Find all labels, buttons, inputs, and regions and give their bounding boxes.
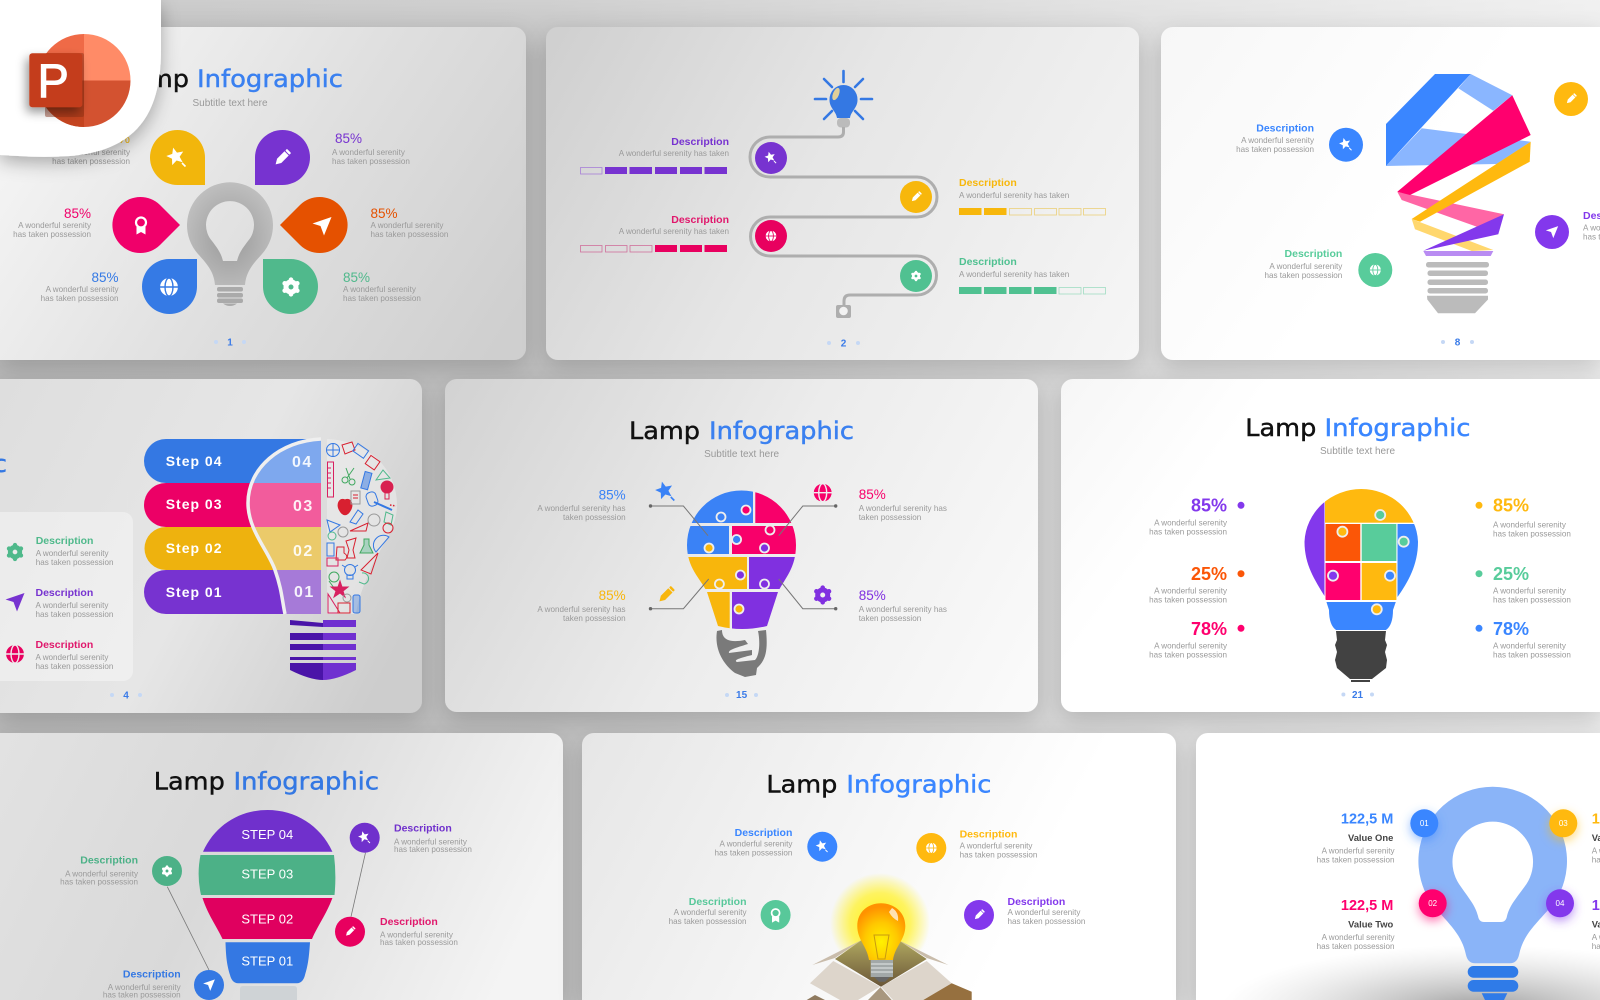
subtitle: Subtitle text here [704, 449, 780, 460]
title: slide 15 [629, 417, 854, 445]
text: purple [859, 588, 947, 623]
winding gray path [750, 127, 937, 306]
text and progress: pink [580, 214, 729, 252]
text: pink: 78% [1191, 619, 1227, 639]
text: blue: Description [735, 827, 792, 839]
text: green: Description [689, 896, 746, 908]
pager: slide 15: 15 [736, 690, 748, 701]
text: blue: A wonderful serenity [1493, 641, 1567, 650]
text: yellow: Description [960, 829, 1017, 841]
text: purple [394, 823, 472, 854]
panel: slide with step lamp [0, 733, 563, 1000]
text: value four [1592, 898, 1600, 951]
badge 03 [1549, 809, 1577, 841]
text: purple: Description [1008, 896, 1065, 908]
lamp: step 03: STEP 03 [241, 867, 293, 882]
text: blue: A wonderful serenity has [537, 504, 626, 513]
title: slide 15: Infographic [709, 417, 854, 445]
text: orange item: A wonderful serenity [370, 221, 444, 230]
bars: steps 01 to 04: Step 04 [166, 453, 223, 469]
text: value one: Value One [1348, 832, 1393, 843]
lamp: gray bulb [187, 182, 273, 306]
node: yellow [916, 833, 946, 863]
lamp: blue bulb [1418, 787, 1567, 1000]
text: green: A wonderful serenity [65, 870, 139, 879]
text: blue: 78% [1493, 619, 1529, 639]
text: purple: 85% [1191, 496, 1227, 516]
text and progress: pink: A wonderful serenity has taken [619, 227, 729, 236]
text: blue [537, 487, 626, 522]
pager: slide 1: 1 [227, 338, 233, 348]
text: green: 25% [1493, 564, 1529, 584]
pager: slide 21: 21 [1352, 690, 1363, 701]
text: blue: 85% [599, 487, 626, 502]
text: purple: A wonderful serenity [1008, 908, 1081, 917]
title: Infographic [846, 770, 991, 798]
text: green: A wonderful serenity [1269, 262, 1343, 271]
node: yellow [900, 181, 932, 213]
item: green: Description [36, 535, 93, 547]
text and progress: green [959, 256, 1106, 294]
panel: slide 8 ribbon lamp [1161, 27, 1600, 360]
text: pink: A wonderful serenity [1154, 641, 1228, 650]
panel: slide with blue lamp values [1196, 733, 1600, 1000]
node: pink [335, 917, 365, 947]
text: yellow: taken possession [563, 614, 626, 623]
text: purple: Description [394, 823, 452, 835]
lamp base: purple [290, 620, 356, 680]
text: green [60, 855, 139, 886]
item: pink: has taken possession [36, 662, 113, 671]
text: blue [103, 968, 182, 1000]
text: blue item: has taken possession [41, 294, 118, 303]
node: blue [194, 970, 224, 1000]
text: orange [1149, 564, 1244, 605]
title: slide 15: Lamp [629, 417, 700, 445]
text: pink item: 85% [64, 206, 91, 221]
icon: gear [814, 585, 831, 605]
text: purple item: A wonderful serenity [332, 148, 406, 157]
card: description list [0, 512, 133, 681]
node: purple [350, 823, 380, 853]
icon: green petal [263, 259, 318, 314]
node: pink [755, 220, 787, 252]
text: purple item: has taken possession [332, 157, 410, 166]
text: blue: has taken possession [1236, 145, 1314, 154]
text: yellow: has taken possession [1493, 529, 1571, 538]
title: slide 21 [1245, 414, 1470, 442]
text: green: A wonderful serenity [674, 908, 747, 917]
title: slide 1: Lamp [118, 65, 189, 93]
lamp base [240, 986, 297, 1000]
text: pink [1149, 619, 1244, 659]
pager: slide 8: 8 [1455, 338, 1461, 348]
text: blue: has taken possession [103, 990, 181, 1000]
text: value two: Value Two [1348, 919, 1394, 930]
text: yellow [1476, 496, 1571, 538]
subtitle: Subtitle text here [192, 98, 268, 109]
text: pink: 85% [859, 487, 886, 502]
text: pink: taken possession [859, 513, 921, 522]
text: blue: A wonderful serenity [720, 839, 793, 848]
text: purple: A wonderful serenity has [859, 605, 947, 614]
lamp: color pieces [1304, 489, 1418, 630]
text: yellow [537, 588, 626, 623]
bars: steps 01 to 04: 01 [294, 584, 315, 601]
text and progress: purple [580, 136, 729, 174]
text: blue: Description [1256, 123, 1314, 135]
badge 03: 03 [1559, 819, 1568, 828]
text: blue [715, 827, 793, 857]
text: pink [859, 487, 947, 522]
icon: P tile: P [38, 54, 69, 107]
text: yellow item [52, 131, 131, 166]
floor shadow [1196, 940, 1600, 1000]
text: purple: 85% [859, 588, 886, 603]
text: purple [1583, 210, 1600, 242]
badge 01: 01 [1420, 819, 1429, 828]
bars: steps 01 to 04 [144, 439, 321, 614]
item: purple: has taken possession [36, 610, 113, 619]
lamp: step 03 [199, 855, 335, 895]
lamp: step 04: STEP 04 [241, 827, 293, 842]
lamp: folded ribbon [1386, 74, 1531, 313]
text: pink item [13, 206, 92, 239]
icon: P tile [29, 53, 82, 107]
text: yellow: A wonderful serenity [960, 841, 1033, 850]
text: purple: A wonderful serenity [394, 838, 468, 846]
text and progress: green: A wonderful serenity has taken [959, 270, 1069, 279]
text: purple: has taken possession [1149, 527, 1227, 536]
text: green item [343, 270, 421, 303]
pager: slide 21 [1341, 690, 1374, 701]
connector lines [167, 853, 366, 970]
node: purple [964, 900, 994, 930]
text: value two [1317, 898, 1395, 951]
icon: globe [814, 484, 832, 502]
text: orange: has taken possession [1149, 596, 1227, 605]
text: green: has taken possession [1493, 596, 1571, 605]
badge: PowerPoint logo on white corner [0, 0, 161, 157]
icon: purple petal [255, 130, 310, 185]
text: pink [380, 916, 458, 947]
badge 02: 02 [1428, 899, 1438, 908]
text: orange item: 85% [370, 206, 398, 221]
text: purple item [332, 131, 410, 166]
bars: steps 01 to 04: Step 03 [166, 496, 223, 512]
text: orange: A wonderful serenity [1154, 587, 1228, 596]
text: blue [1476, 619, 1571, 659]
text: yellow [960, 829, 1037, 859]
item: green: has taken possession [36, 558, 114, 567]
text: orange item: has taken possession [370, 230, 448, 239]
text: purple: taken possession [859, 614, 921, 623]
bars: steps 01 to 04: Step 01 [166, 584, 223, 600]
text and progress: purple: Description [671, 136, 729, 148]
panel: slide 21 color block lamp [1061, 379, 1600, 712]
text: green: Description [80, 855, 138, 867]
icon: PowerPoint circle [38, 34, 130, 127]
text: green: A wonderful serenity [1493, 587, 1567, 596]
item: green [7, 535, 114, 567]
title: Lamp [154, 767, 225, 795]
text: pink item: has taken possession [13, 230, 91, 239]
text: purple: has taken possession [394, 845, 472, 854]
badge 02 [1419, 889, 1447, 921]
lamp base: gray filament [716, 630, 767, 677]
badge 04: 04 [1556, 899, 1565, 908]
pager: slide 4: 4 [123, 690, 129, 702]
text: value two: A wonderful serenity [1322, 933, 1395, 942]
text: value two: has taken possession [1317, 942, 1394, 951]
icon: blue petal [142, 259, 197, 314]
node: purple [755, 142, 787, 174]
text: green item: A wonderful serenity [343, 285, 417, 294]
item: purple: Description [36, 587, 93, 599]
text: value one [1317, 811, 1395, 864]
title: Infographic [234, 767, 379, 795]
item: pink [6, 639, 113, 671]
text: yellow item: has taken possession [52, 157, 130, 166]
text: yellow: A wonderful serenity [1493, 520, 1567, 529]
title: slide 1: Infographic [197, 65, 343, 93]
text and progress: yellow: A wonderful serenity has taken [959, 191, 1069, 200]
title [154, 767, 379, 795]
bars: steps 01 to 04: 04 [292, 454, 313, 471]
item: green: A wonderful serenity [36, 549, 110, 558]
item: pink: Description [36, 639, 93, 651]
panel: slide 15 puzzle lamp [445, 379, 1038, 712]
text and progress: purple: A wonderful serenity has taken [619, 149, 729, 158]
lamp: puzzle pieces [687, 490, 796, 629]
icon: yellow petal [150, 130, 205, 185]
node: green [900, 260, 932, 292]
bars: steps 01 to 04: 02 [293, 543, 314, 560]
connector lines [649, 504, 837, 610]
title: slide 21: Infographic [1324, 414, 1470, 442]
text: pink: A wonderful serenity [380, 930, 454, 939]
text: green: has taken possession [1264, 271, 1342, 280]
lamp: step 02 [202, 898, 332, 939]
text: blue: A wonderful serenity [108, 983, 182, 992]
badge 01 [1410, 809, 1438, 841]
node: blue [1329, 128, 1363, 162]
illustration: open box with glowing bulb [807, 873, 972, 1000]
lamp base: dark screw [1335, 631, 1387, 682]
item: purple [6, 587, 113, 619]
text: green item: has taken possession [343, 294, 421, 303]
text: pink: A wonderful serenity has [859, 504, 947, 513]
text: value one: A wonderful serenity [1322, 846, 1395, 855]
panel: slide 2 winding path [546, 27, 1139, 360]
text: green item: 85% [343, 270, 370, 285]
text: value one: has taken possession [1317, 855, 1394, 864]
icon: pink petal [112, 197, 180, 253]
text: purple [1008, 896, 1085, 926]
lamp: step 02: STEP 02 [241, 911, 293, 926]
text and progress: yellow [959, 177, 1106, 215]
node: green [761, 900, 791, 930]
text: yellow: has taken possession [960, 850, 1037, 859]
text: yellow: 85% [1493, 496, 1529, 516]
text: green [1264, 248, 1343, 280]
text: purple: A wonderful serenity [1154, 518, 1228, 527]
text: blue item: A wonderful serenity [46, 285, 119, 294]
icon: star [655, 482, 674, 500]
node: green [1358, 253, 1392, 287]
title [766, 770, 991, 798]
text: orange: 25% [1191, 564, 1227, 584]
text: blue: A wonderful serenity [1241, 136, 1315, 145]
text: green [1476, 564, 1571, 605]
icon: blue lamp with rays [815, 71, 872, 128]
pager: slide 15 [725, 690, 758, 701]
text: blue: Description [123, 968, 181, 980]
text: blue item: 85% [91, 270, 118, 285]
lamp: step 01 [226, 942, 310, 983]
text: blue: taken possession [563, 513, 626, 522]
text: green [669, 896, 747, 926]
text: green: Description [1285, 248, 1342, 260]
text: green: has taken possession [60, 877, 138, 886]
bars: steps 01 to 04: Step 02 [166, 540, 223, 556]
text: yellow: 85% [599, 588, 626, 603]
icon: pencil [657, 586, 675, 603]
text: value three [1592, 811, 1600, 864]
text and progress: green: Description [959, 256, 1017, 268]
text: pink: has taken possession [1149, 650, 1227, 659]
node: yellow [1554, 82, 1588, 116]
pager: slide 2: 2 [841, 338, 847, 350]
text: yellow item: 85% [103, 131, 130, 146]
text: value one: 122,5 M [1341, 811, 1393, 827]
text: blue [1236, 123, 1315, 154]
panel: slide 4 step bars lamp [0, 379, 422, 713]
text: green: has taken possession [669, 917, 746, 926]
subtitle: Subtitle text here [1320, 446, 1395, 457]
text: pink: Description [380, 916, 438, 928]
text: pink: has taken possession [380, 938, 458, 947]
plug end [836, 305, 851, 318]
badge 04 [1546, 889, 1574, 921]
doodle half of lamp [326, 439, 397, 614]
text: blue: has taken possession [715, 848, 792, 857]
pager: slide 4 [110, 690, 142, 702]
lamp: step 04 [203, 810, 332, 852]
node: green [152, 856, 182, 886]
text and progress: yellow: Description [959, 177, 1017, 189]
node: purple [1535, 215, 1569, 249]
text: purple [1149, 496, 1244, 536]
text: pink item: A wonderful serenity [18, 221, 92, 230]
item: pink: A wonderful serenity [36, 653, 109, 662]
panel: slide 1 petals around lamp [0, 27, 526, 360]
pager: slide 8 [1441, 338, 1474, 348]
text: yellow item: A wonderful serenity [57, 148, 131, 157]
title: Lamp [766, 770, 837, 798]
title: slide 21: Lamp [1245, 414, 1316, 442]
panel: slide with glowing lamp in box [582, 733, 1176, 1000]
bars: steps 01 to 04: 03 [293, 498, 314, 515]
text: blue: has taken possession [1493, 650, 1571, 659]
lamp: step 01: STEP 01 [241, 954, 293, 969]
pager: slide 1 [214, 338, 246, 348]
pager: slide 2 [827, 338, 860, 350]
title: slide 1 [118, 65, 343, 93]
node: blue [807, 832, 837, 862]
text: yellow: A wonderful serenity has [537, 605, 626, 614]
text: blue item [41, 270, 119, 303]
text: orange item [370, 206, 448, 239]
text: value two: 122,5 M [1341, 898, 1393, 914]
text and progress: pink: Description [671, 214, 729, 226]
item: purple: A wonderful serenity [36, 601, 109, 610]
text: purple: has taken possession [1008, 917, 1085, 926]
text: purple item: 85% [335, 131, 362, 146]
icon: orange petal [280, 197, 348, 253]
